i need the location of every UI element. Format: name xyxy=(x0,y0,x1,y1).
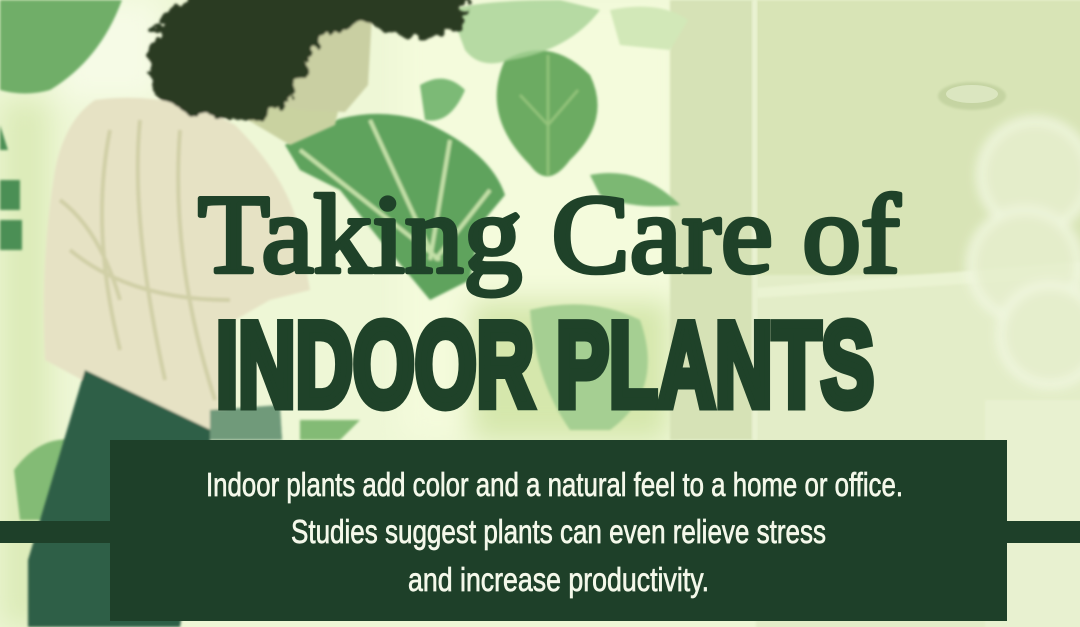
intro text line 2: Studies suggest plants can even relieve stress xyxy=(291,513,826,550)
title: Taking Care of: Taking Care of xyxy=(198,173,901,297)
plants xyxy=(0,0,688,520)
right accent bar xyxy=(1007,521,1080,543)
glass light globes xyxy=(970,120,1080,385)
intro text line 3: and increase productivity. xyxy=(408,561,709,598)
left accent bar xyxy=(0,521,110,543)
intro text line 1: Indoor plants add color and a natural feel to a home or office. xyxy=(206,466,903,503)
intro panel xyxy=(110,440,1007,621)
room wall and ceiling xyxy=(756,0,1080,627)
woman xyxy=(28,0,467,627)
